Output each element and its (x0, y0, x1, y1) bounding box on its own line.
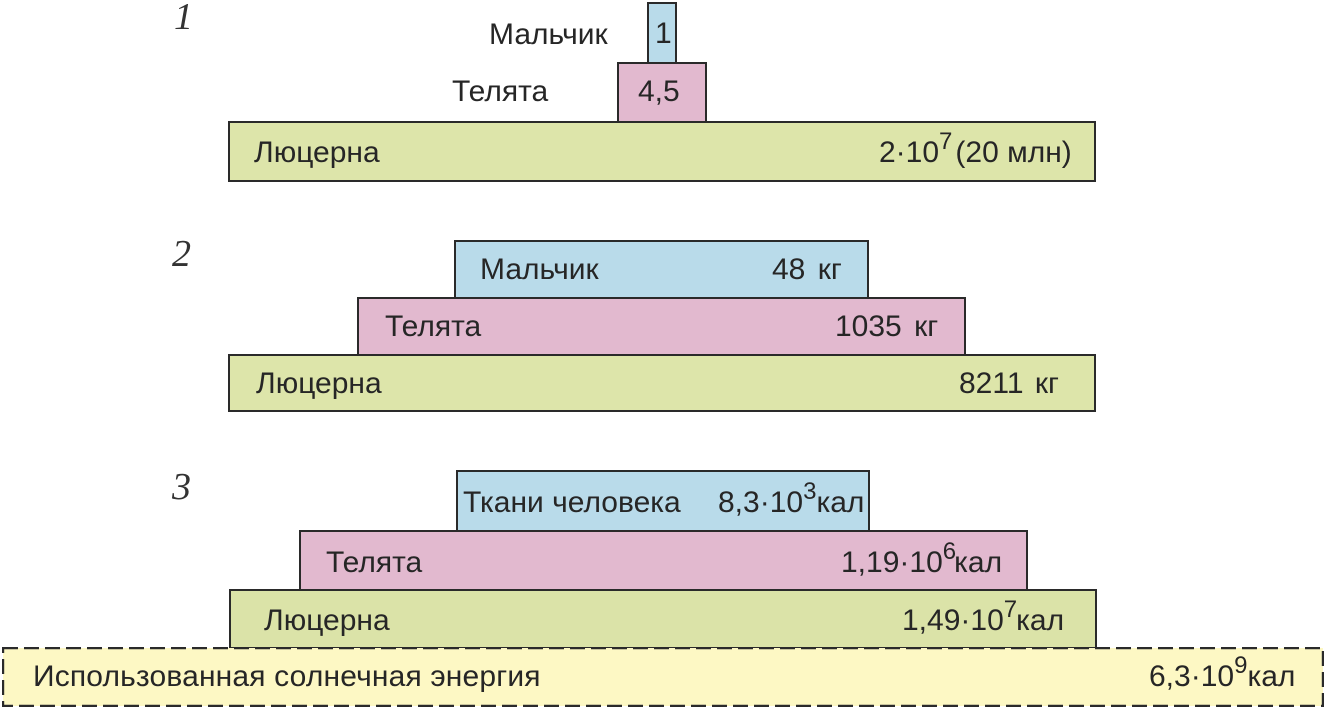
value: calves: 1035 кг (835, 310, 938, 343)
pyramid 2: biomass (172, 233, 1096, 412)
value: solar energy: 6,3·109кал (1149, 652, 1295, 693)
number 3: 3 (172, 466, 191, 508)
value: human tissue: 8,3·103кал (718, 478, 864, 519)
bar: calves (299, 530, 1028, 591)
bar: boy (454, 240, 869, 299)
label: calves: Телята (326, 546, 422, 579)
label: calves: Телята (452, 75, 548, 108)
label: boy: Мальчик (480, 253, 599, 286)
pyramid 1: numbers (174, 0, 1096, 182)
value: boy: 48 кг (772, 253, 842, 286)
bar: calves (617, 62, 707, 123)
number 2: 2 (172, 233, 191, 275)
value: alfalfa: 8211 кг (959, 367, 1059, 400)
value: 4,5: 4,5 (638, 75, 680, 108)
label: human tissue: Ткани человека (463, 486, 681, 519)
value: 1: 1 (655, 17, 672, 50)
bar: solar energy (dashed) (2, 647, 1324, 707)
value: calves: 1,19·106кал (841, 538, 1002, 579)
bar: alfalfa (229, 589, 1097, 649)
label: calves: Телята (385, 310, 481, 343)
label: solar energy: Использованная солнечная энергия (33, 660, 541, 693)
label: alfalfa: Люцерна (256, 367, 382, 400)
label: alfalfa: Люцерна (254, 136, 380, 169)
bar: calves (357, 297, 966, 356)
bar: alfalfa (228, 121, 1096, 182)
label: alfalfa: Люцерна (264, 604, 390, 637)
value: alfalfa: 2·107(20 млн) (879, 128, 1072, 169)
value: alfalfa: 1,49·107кал (902, 596, 1064, 637)
pyramid 3: energy (2, 466, 1324, 707)
bar: alfalfa (228, 354, 1096, 412)
bar: boy (647, 2, 677, 64)
bar: human tissue (456, 470, 870, 532)
label: boy: Мальчик (489, 18, 608, 51)
